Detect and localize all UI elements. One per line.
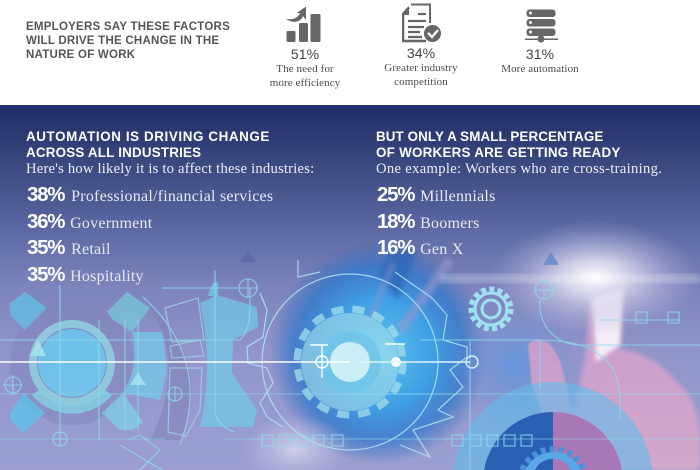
large outline gear bbox=[247, 260, 467, 457]
right subheading: One example: Workers who are cross-training. bbox=[376, 161, 662, 177]
stat: automation: More automation bbox=[501, 63, 579, 75]
left heading: AUTOMATION IS DRIVING CHANGE bbox=[26, 129, 270, 144]
stat: competition: Greater industry bbox=[384, 62, 458, 74]
left solid gear bbox=[10, 292, 167, 433]
hand bbox=[528, 290, 700, 470]
second teal gear bbox=[143, 282, 258, 445]
stat: competition bbox=[384, 45, 458, 88]
right list: generations: 16% Gen X bbox=[377, 236, 464, 259]
right list: generations: 18% Boomers bbox=[377, 210, 480, 233]
left list: industries: 38% Professional/financial services bbox=[27, 183, 273, 206]
left list: industries: 36% Government bbox=[27, 210, 152, 233]
right list: generations bbox=[377, 183, 496, 259]
left heading bbox=[26, 129, 270, 160]
bottom right gear bbox=[454, 382, 652, 470]
light glow bbox=[440, 220, 700, 335]
background image panel: gears and hand bbox=[0, 105, 700, 470]
icon: bar chart with arrow bbox=[286, 6, 320, 42]
stat: efficiency: The need for bbox=[276, 63, 334, 75]
left list: industries: 35% Retail bbox=[27, 236, 111, 259]
left list: industries bbox=[27, 183, 273, 286]
bright node and arrows bbox=[0, 250, 559, 385]
stat: efficiency: 51% bbox=[291, 46, 319, 62]
icon: server stack bbox=[525, 10, 558, 42]
central bright gear bbox=[297, 309, 403, 415]
stat: competition: competition bbox=[394, 76, 448, 88]
title: WILL DRIVE THE CHANGE IN THE bbox=[26, 35, 219, 47]
right list: generations: 25% Millennials bbox=[377, 183, 496, 206]
title: NATURE OF WORK bbox=[26, 49, 135, 61]
icon: document with check bbox=[402, 4, 441, 42]
left heading: ACROSS ALL INDUSTRIES bbox=[26, 144, 201, 160]
stat: automation bbox=[501, 46, 579, 75]
right heading: BUT ONLY A SMALL PERCENTAGE bbox=[376, 129, 603, 144]
circuit lines bbox=[0, 270, 700, 470]
stat: competition: 34% bbox=[407, 45, 435, 61]
right heading bbox=[376, 129, 621, 160]
title: EMPLOYERS SAY THESE FACTORS bbox=[26, 21, 230, 33]
title bbox=[26, 21, 230, 61]
small cog bbox=[471, 289, 511, 329]
stat: efficiency: more efficiency bbox=[270, 77, 340, 89]
right heading: OF WORKERS ARE GETTING READY bbox=[376, 144, 621, 160]
blue light region bbox=[240, 205, 700, 470]
left list: industries: 35% Hospitality bbox=[27, 263, 144, 286]
stat: efficiency bbox=[270, 46, 340, 89]
left subheading: Here's how likely it is to affect these industries: bbox=[26, 161, 314, 177]
stat: automation: 31% bbox=[526, 46, 554, 62]
